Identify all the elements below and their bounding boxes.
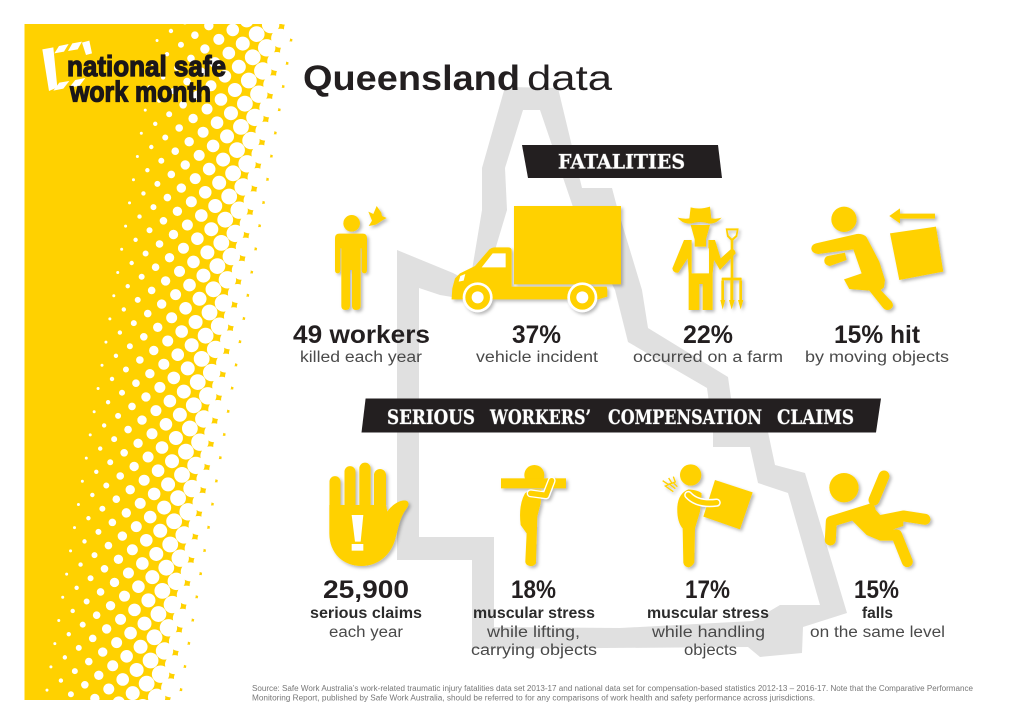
stat: 25,900 serious claims: [310, 576, 422, 641]
logo: national safe work month: national safe: [67, 51, 226, 83]
icon: person handling box: [663, 464, 753, 567]
stat: 49 workers: [293, 321, 430, 366]
stat: 18% muscular stress lifting: carrying objects: [471, 642, 597, 659]
icon: raised hand with exclamation: [329, 468, 409, 566]
stat: 25,900 serious claims: 25,900: [323, 576, 409, 604]
icon: person lifting plank: [501, 465, 566, 566]
stat: 17% muscular stress handling: muscular stress: [647, 605, 769, 622]
map: Queensland outline: [397, 87, 847, 657]
heading: fatalities banner: FATALITIES: [558, 150, 685, 174]
icon: person falling: [829, 473, 925, 562]
heading: fatalities banner: [522, 145, 722, 178]
stat: 25,900 serious claims: each year: [329, 624, 403, 641]
stat: 17% muscular stress handling: while handling: [651, 624, 765, 641]
stat: 15% hit: [805, 321, 949, 366]
logo: national safe work month: work month: [69, 76, 211, 108]
heading: serious workers' compensation claims banner: WORKERS’: [489, 405, 591, 429]
stat: 15% hit: 15% hit: [834, 321, 921, 349]
heading: serious workers' compensation claims banner: [362, 398, 881, 432]
stat: 18% muscular stress lifting: while lifting,: [486, 624, 580, 641]
heading: serious workers' compensation claims banner: CLAIMS: [777, 405, 854, 429]
logo: national safe work month: [42, 41, 226, 108]
stat: 49 workers: killed each year: [300, 349, 422, 366]
stat: 17% muscular stress handling: [647, 576, 769, 659]
stat: 18% muscular stress lifting: muscular stress: [473, 605, 595, 622]
panel: yellow halftone side band: [24, 1, 322, 722]
stat: 15% falls: 15%: [854, 576, 899, 604]
icon: person hit by moving object: [811, 207, 943, 310]
source note: Monitoring Report, published by Safe Work Australia, should be referred to for any comparisons of work health and safety performance across jurisdictions.: [252, 694, 815, 702]
title: Queensland: [303, 59, 520, 98]
stat: 22% on a farm: 22%: [683, 321, 733, 349]
heading: serious workers' compensation claims banner: COMPENSATION: [608, 405, 762, 429]
stat: 37% vehicle incident: vehicle incident: [476, 349, 599, 366]
stat: 37% vehicle incident: [476, 321, 599, 366]
stat: 25,900 serious claims: serious claims: [310, 605, 422, 622]
stat: 17% muscular stress handling: objects: [684, 642, 737, 659]
stat: 15% falls: falls: [862, 605, 893, 622]
title: [303, 59, 613, 98]
icon: truck: [452, 206, 621, 312]
stat: 15% falls: on the same level: [810, 624, 945, 641]
stat: 22% on a farm: occurred on a farm: [633, 349, 783, 366]
heading: serious workers' compensation claims banner: SERIOUS: [387, 405, 475, 429]
stat: 15% falls: [810, 576, 945, 641]
stat: 18% muscular stress lifting: 18%: [511, 576, 556, 604]
source note: [252, 684, 974, 702]
title: data: [527, 59, 613, 98]
icon: person with dove: [335, 206, 387, 310]
stat: 17% muscular stress handling: 17%: [685, 576, 730, 604]
icon: farmer with pitchfork: [672, 207, 743, 310]
stat: 49 workers: 49 workers: [293, 321, 430, 349]
stat: 37% vehicle incident: 37%: [512, 321, 561, 349]
stat: 22% on a farm: [633, 321, 783, 366]
source note: Source: Safe Work Australia’s work-related traumatic injury fatalities data set 2013-17 and national data set for compensation-based statistics 2012-13 – 2016-17. Note that the Comparative Performance: [252, 684, 974, 693]
stat: 18% muscular stress lifting: [471, 576, 597, 659]
stat: 15% hit: by moving objects: [805, 349, 949, 366]
